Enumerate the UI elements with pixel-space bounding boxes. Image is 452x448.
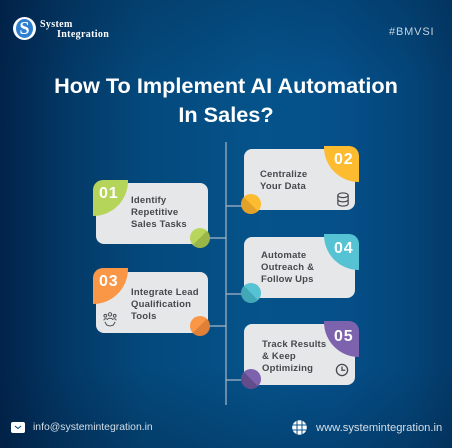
card body xyxy=(96,183,208,244)
connector dot xyxy=(190,316,210,336)
panel: step 05 xyxy=(241,321,359,389)
website text: www.systemintegration.in xyxy=(316,422,442,434)
footer email xyxy=(11,422,153,433)
panel: step 02 xyxy=(241,146,359,214)
logo xyxy=(13,17,109,40)
email text: info@systemintegration.in xyxy=(33,422,153,433)
panel: step 01 xyxy=(93,180,210,248)
step text: Sales Tasks xyxy=(131,219,187,230)
icon: clock xyxy=(336,364,348,376)
number badge 01: 01 xyxy=(99,185,118,202)
step text: Identify xyxy=(131,195,166,206)
step text: Track Results xyxy=(262,339,326,350)
card body xyxy=(96,272,208,333)
logo wordmark: System xyxy=(40,19,73,30)
icon: globe xyxy=(292,420,307,435)
logo wordmark: Integration xyxy=(57,29,109,40)
number badge 04: 04 xyxy=(334,240,353,257)
step text: Automate xyxy=(261,250,306,261)
icon: team gear xyxy=(104,312,116,326)
step text: Optimizing xyxy=(262,363,313,374)
step text: Qualification xyxy=(131,299,191,310)
icon: database xyxy=(337,192,349,207)
step text xyxy=(261,250,314,285)
icon: envelope xyxy=(11,422,25,433)
step text: Your Data xyxy=(260,181,306,192)
step text xyxy=(262,339,326,374)
step text: Centralize xyxy=(260,169,307,180)
panel: step 03 xyxy=(93,268,210,336)
step text xyxy=(131,287,199,322)
step text: Tools xyxy=(131,311,157,322)
card body xyxy=(244,324,355,385)
number badge 02 xyxy=(324,146,359,182)
connector dot xyxy=(241,283,261,303)
step text: Integrate Lead xyxy=(131,287,199,298)
logo mark xyxy=(13,17,36,40)
number badge 05 xyxy=(324,321,359,357)
card body xyxy=(244,149,355,210)
card body xyxy=(244,237,355,298)
panel: step 04 xyxy=(241,234,359,303)
number badge 01 xyxy=(93,180,128,216)
connector dot xyxy=(241,369,261,389)
number badge 02: 02 xyxy=(334,151,353,168)
number badge 03 xyxy=(93,268,128,304)
number badge 05: 05 xyxy=(334,328,353,345)
footer website xyxy=(292,420,442,435)
logo mark: S xyxy=(19,18,30,38)
step text: Outreach & xyxy=(261,262,314,273)
title: In Sales? xyxy=(178,102,274,127)
step text xyxy=(131,195,187,230)
connector dot xyxy=(190,228,210,248)
step text: & Keep xyxy=(262,351,296,362)
hashtag: #BMVSI xyxy=(389,26,434,38)
logo wordmark xyxy=(40,19,109,40)
step text: Follow Ups xyxy=(261,274,314,285)
number badge 03: 03 xyxy=(99,273,118,290)
title: How To Implement AI Automation xyxy=(54,73,398,98)
step text xyxy=(260,169,307,192)
title xyxy=(54,73,398,127)
connector dot xyxy=(241,194,261,214)
step text: Repetitive xyxy=(131,207,178,218)
number badge 04 xyxy=(324,234,359,270)
